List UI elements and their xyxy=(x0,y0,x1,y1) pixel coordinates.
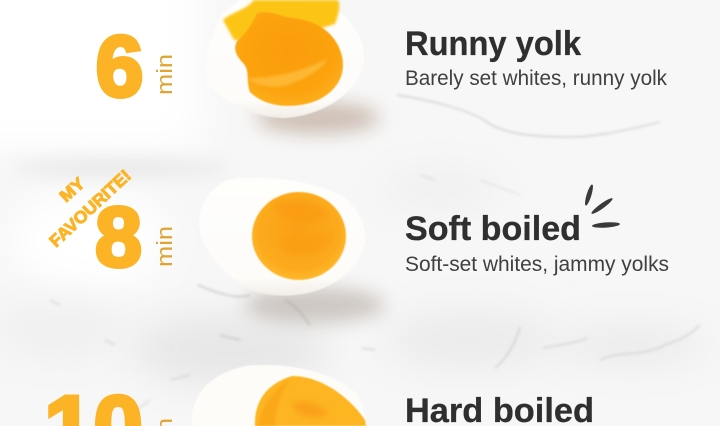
time: 8 min: min xyxy=(152,226,177,267)
egg: hard boiled xyxy=(192,365,366,426)
time: 6 min: 6 xyxy=(96,19,143,115)
time: 8 min xyxy=(95,190,177,284)
heading: runny yolk: Runny yolk xyxy=(405,25,581,63)
time: 6 min xyxy=(96,19,177,115)
heading: soft boiled: Soft boiled xyxy=(405,210,581,248)
callout: my favourite: MY xyxy=(56,173,89,206)
callout: my favourite: FAVOURITE! xyxy=(46,166,135,251)
egg: soft boiled xyxy=(199,178,385,323)
time: 6 min: min xyxy=(152,54,177,95)
time: 8 min: 8 xyxy=(95,190,142,284)
egg: runny yolk xyxy=(205,0,380,134)
text: soft boiled description: Soft-set whites, jammy yolks xyxy=(405,253,669,276)
icon: emphasis strokes xyxy=(583,184,620,229)
text: runny yolk description: Barely set whites, runny yolk xyxy=(405,67,667,90)
